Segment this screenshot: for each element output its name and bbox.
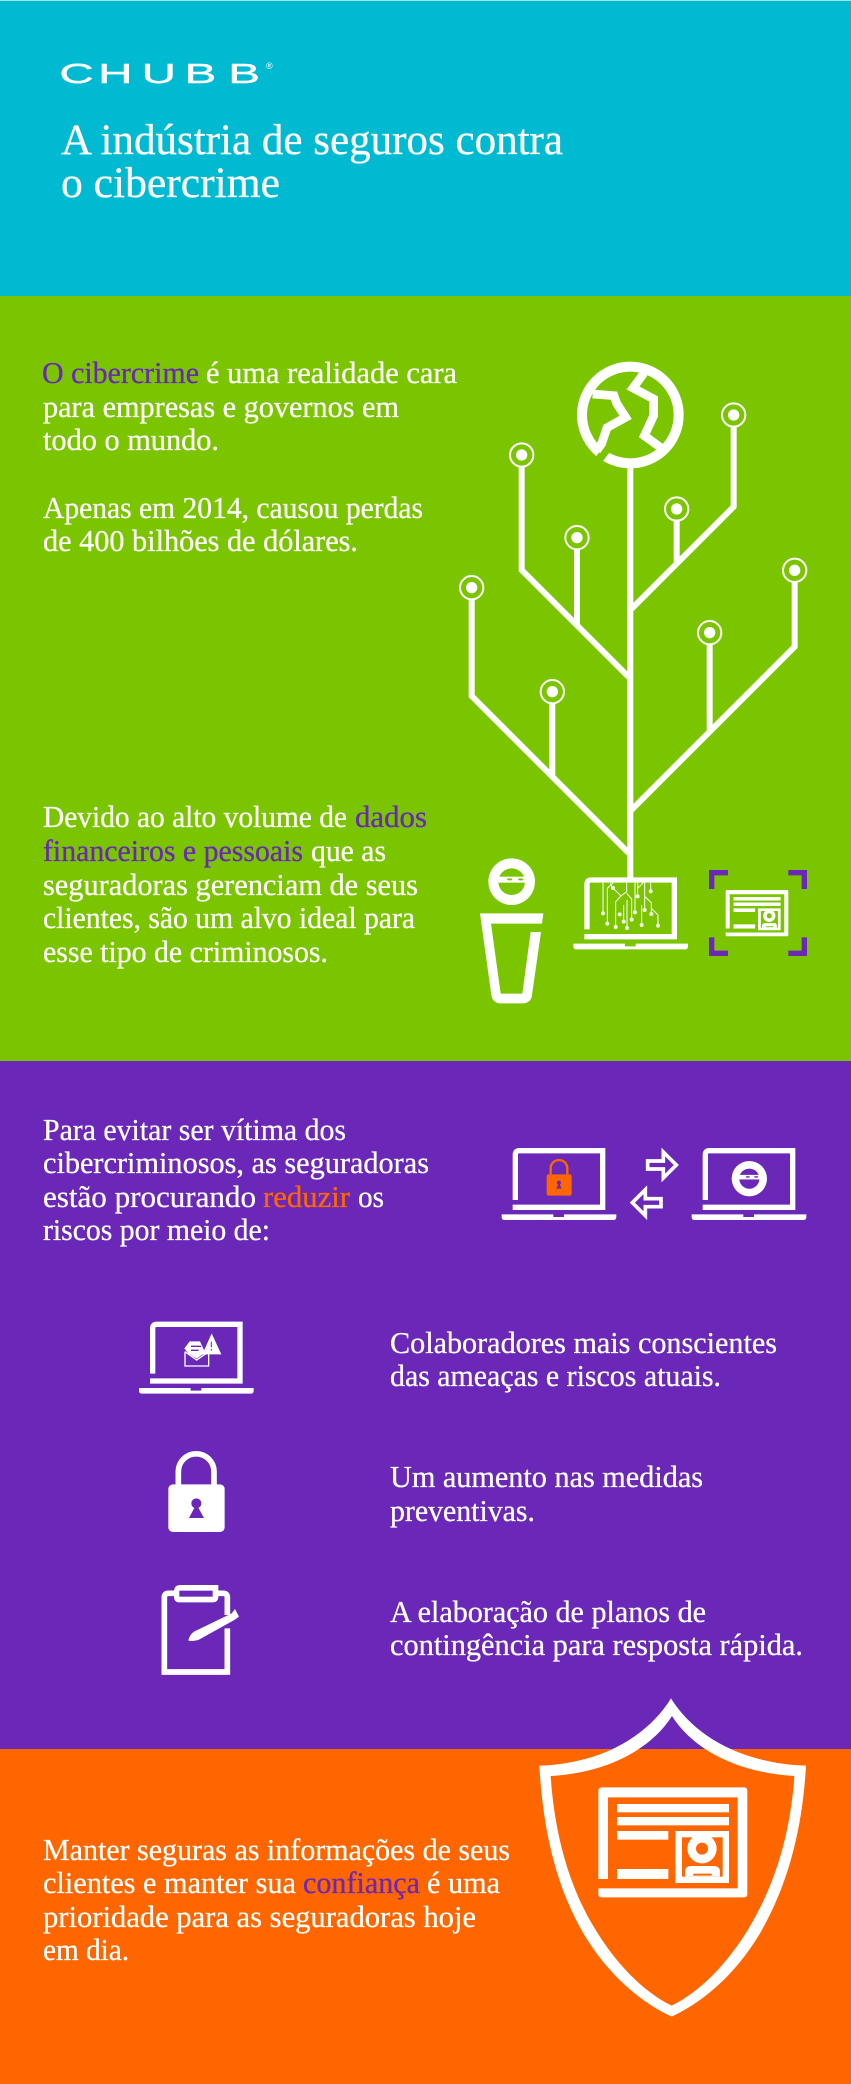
text block: keep client data safe: é uma <box>427 1865 500 1900</box>
icon: scanned id card <box>712 873 804 953</box>
text block: insurers as a target: esse tipo de criminosos. <box>43 934 328 969</box>
logo: Chubb: ® <box>266 61 273 71</box>
text block: intro <box>43 1112 429 1247</box>
icons: criminal, laptop and id card row <box>480 858 804 1003</box>
text block: insurers as a target: financeiros e pessoais <box>43 833 303 868</box>
text block: insurers as a target: clientes, são um alvo ideal para <box>43 900 415 935</box>
text: preventivas. <box>390 1493 535 1528</box>
icon: masked person <box>480 858 543 1003</box>
icon: padlock <box>168 1454 225 1532</box>
item: preventive measures <box>168 1454 703 1532</box>
text block: insurers as a target: Devido ao alto volume de <box>43 799 347 834</box>
text block: intro: cibercriminosos, as seguradoras <box>43 1145 429 1180</box>
text block: intro: estão procurando <box>43 1179 256 1214</box>
text block: cybercrime is costly: Apenas em 2014, causou perdas <box>43 490 423 525</box>
icon: laptop with circuit <box>573 880 688 949</box>
text block: keep client data safe <box>43 1832 510 1967</box>
icon: laptop with lock <box>502 1151 616 1220</box>
panel: header <box>0 0 851 296</box>
logo: Chubb: CHUBB <box>59 59 260 89</box>
panel: purple risk reduction <box>0 1061 851 1749</box>
text block: intro: riscos por meio de: <box>43 1212 270 1247</box>
text block: keep client data safe: em dia. <box>43 1932 129 1967</box>
text <box>390 1459 703 1528</box>
text block: insurers as a target <box>43 799 427 969</box>
icons: laptops exchange <box>502 1151 806 1220</box>
text: Um aumento nas medidas <box>390 1459 703 1494</box>
icon: laptop with criminal <box>692 1151 806 1220</box>
text block: intro: reduzir <box>263 1179 351 1214</box>
item: aware employees <box>139 1324 777 1394</box>
icon: clipboard and pen <box>164 1585 239 1672</box>
text block: cybercrime is costly <box>42 355 457 558</box>
title: A indústria de seguros contra <box>61 117 563 164</box>
text: das ameaças e riscos atuais. <box>390 1358 721 1393</box>
text <box>390 1325 777 1393</box>
item: contingency plans <box>164 1585 803 1672</box>
text: Colaboradores mais conscientes <box>390 1325 777 1360</box>
text block: cybercrime is costly: para empresas e governos em <box>43 389 399 424</box>
text block: keep client data safe: prioridade para as seguradoras hoje <box>43 1899 476 1934</box>
text: contingência para resposta rápida. <box>390 1627 803 1662</box>
icon: laptop with envelope and warning <box>139 1324 254 1394</box>
text block: intro: Para evitar ser vítima dos <box>43 1112 346 1147</box>
panel: orange trust <box>0 1698 851 2084</box>
text block: cybercrime is costly: de 400 bilhões de dólares. <box>43 523 358 558</box>
text block: cybercrime is costly: todo o mundo. <box>43 422 219 457</box>
icon: shield with id card <box>539 1698 806 2017</box>
text block: keep client data safe: confiança <box>303 1865 420 1900</box>
text block: keep client data safe: Manter seguras as informações de seus <box>43 1832 510 1867</box>
text block: cybercrime is costly: é uma realidade cara <box>206 355 457 390</box>
text block: insurers as a target: dados <box>355 799 427 834</box>
icon: arrows <box>632 1152 676 1216</box>
title: o cibercrime <box>61 160 280 207</box>
text block: intro: os <box>358 1179 384 1214</box>
chart: circuit tree with globe <box>460 367 806 880</box>
icon: cracked globe <box>582 367 679 463</box>
title <box>61 117 563 207</box>
text block: keep client data safe: clientes e manter sua <box>43 1865 296 1900</box>
text block: cybercrime is costly: O cibercrime <box>42 355 199 390</box>
text block: insurers as a target: que as <box>311 833 386 868</box>
text block: insurers as a target: seguradoras gerenciam de seus <box>43 867 418 902</box>
icon: circuit nodes <box>460 403 806 703</box>
text: A elaboração de planos de <box>390 1594 706 1629</box>
panel: green cybercrime reality <box>0 296 851 1061</box>
text <box>390 1594 803 1662</box>
